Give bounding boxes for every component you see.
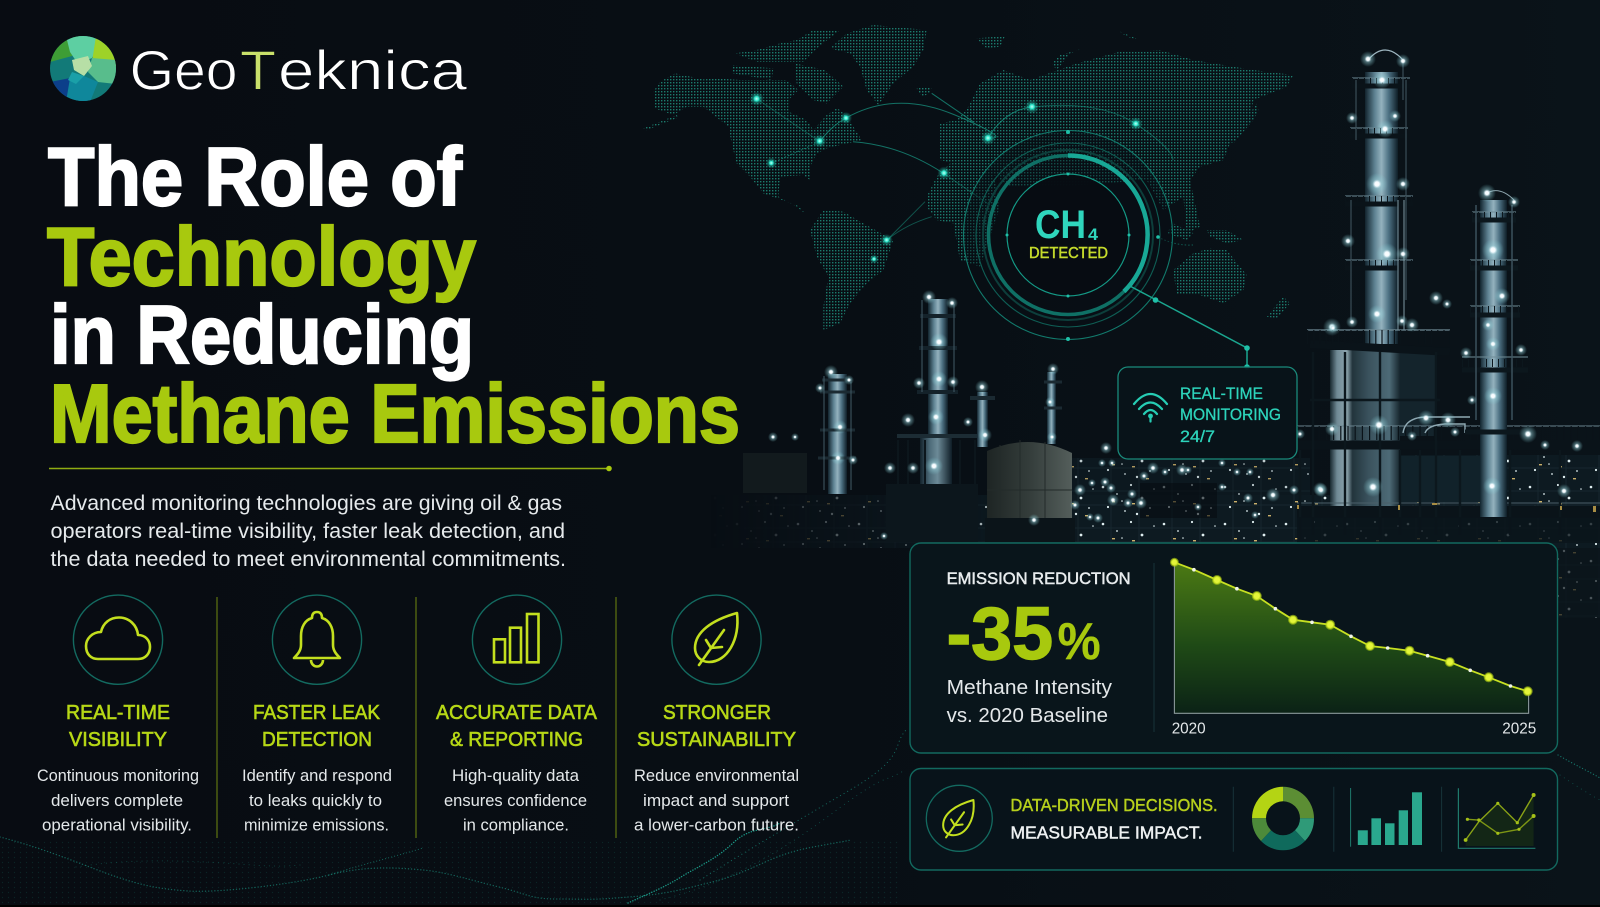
description: Continuous monitoring: [37, 766, 199, 785]
map network arcs: [757, 93, 1193, 245]
ring tick dots: [1006, 130, 1160, 341]
title: Technology: [47, 210, 476, 303]
map glowing nodes: [750, 92, 1142, 264]
refinery: small towers and tanks: [743, 299, 1075, 542]
refinery: second tower: [1462, 191, 1530, 517]
line chart: [1458, 788, 1536, 848]
description: [634, 766, 799, 834]
description: impact and support: [643, 791, 789, 810]
stat description: Methane Intensity: [947, 676, 1113, 699]
heading: VISIBILITY: [69, 728, 167, 751]
chart axis labels: 2025: [1502, 720, 1536, 738]
background wave of dots: [0, 728, 1600, 904]
emission label: EMISSION REDUCTION: [947, 569, 1131, 588]
dotted world map: [640, 20, 1320, 340]
description: [37, 766, 199, 834]
title divider: [49, 466, 612, 471]
heading: ACCURATE DATA: [436, 701, 597, 724]
icon: bar signal: [472, 595, 562, 684]
description: operational visibility.: [42, 816, 192, 834]
CH4 label: [1029, 203, 1108, 262]
big stat: -35: [947, 592, 1053, 675]
callout text: REAL-TIME: [1180, 385, 1263, 403]
heading: & REPORTING: [450, 728, 583, 751]
heading: REAL-TIME: [66, 701, 170, 724]
panel: accurate data and reporting: [436, 595, 597, 834]
description: Identify and respond: [242, 766, 392, 785]
refinery: background plant lights: [710, 455, 1600, 618]
heading: FASTER LEAK: [253, 701, 380, 724]
description: [242, 766, 392, 834]
connector to callout: [1128, 285, 1250, 370]
bar chart: [1351, 788, 1422, 847]
title: in Reducing: [50, 288, 474, 381]
heading: SUSTAINABILITY: [637, 728, 796, 751]
CH4 label: 4: [1088, 225, 1099, 244]
heading: STRONGER: [663, 701, 771, 724]
logo wordmark: Geo: [130, 38, 238, 101]
panel headline: DATA-DRIVEN DECISIONS.: [1010, 795, 1218, 815]
description: High-quality data: [452, 766, 580, 785]
logo: [50, 36, 468, 102]
CH4 label: CH: [1035, 203, 1086, 247]
logo wordmark: [130, 38, 468, 101]
intro paragraph: Advanced monitoring technologies are giving oil & gas: [50, 492, 562, 515]
column dividers: [217, 597, 616, 838]
chart axis labels: [1172, 720, 1536, 738]
CH4 detection target: [964, 130, 1172, 341]
heading: [637, 701, 796, 751]
heading: [66, 701, 170, 751]
big stat: [947, 592, 1101, 675]
stat description: [947, 676, 1113, 727]
chart minor points: [1192, 568, 1512, 688]
refinery: large tower: [1297, 50, 1600, 543]
description: minimize emissions.: [244, 816, 389, 834]
panel: emission reduction: [910, 543, 1558, 753]
description: in compliance.: [463, 816, 569, 834]
description: a lower-carbon future.: [634, 816, 799, 834]
panel headline: [1010, 795, 1218, 842]
chart major points: [1171, 559, 1532, 695]
intro paragraph: operators real-time visibility, faster leak detection, and: [50, 520, 565, 543]
panel headline: MEASURABLE IMPACT.: [1010, 822, 1202, 842]
CH4 label: DETECTED: [1029, 245, 1108, 262]
description: ensures confidence: [444, 791, 587, 810]
heading: DETECTION: [262, 728, 372, 751]
logo globe mark: [50, 36, 116, 102]
panel: stronger sustainability: [634, 595, 799, 834]
panel: data-driven decisions: [910, 768, 1558, 870]
area chart: [1171, 559, 1536, 738]
logo wordmark: T: [240, 38, 276, 101]
description: [444, 766, 587, 834]
title: [47, 130, 740, 460]
title: Methane Emissions: [50, 367, 740, 460]
callout: real-time monitoring: [1118, 367, 1297, 459]
icon: wifi signal: [1134, 394, 1167, 422]
logo wordmark: eknica: [278, 38, 468, 101]
donut chart: [1252, 787, 1314, 850]
icon: leaf: [672, 595, 761, 684]
panel: real-time visibility: [37, 595, 199, 834]
chart axis labels: 2020: [1172, 720, 1206, 738]
heading: [253, 701, 380, 751]
refinery: flood lights: [768, 51, 1583, 540]
icon: bell: [272, 595, 362, 684]
stat description: vs. 2020 Baseline: [947, 704, 1108, 727]
description: delivers complete: [51, 791, 183, 810]
callout text: 24/7: [1180, 428, 1215, 446]
intro paragraph: [50, 492, 566, 571]
icon: leaf badge: [926, 785, 992, 851]
callout text: [1180, 385, 1281, 446]
title: The Role of: [48, 130, 462, 223]
big stat: %: [1058, 613, 1101, 671]
panel: faster leak detection: [242, 595, 392, 834]
icon: cloud: [73, 595, 163, 684]
description: Reduce environmental: [634, 766, 799, 785]
description: to leaks quickly to: [249, 791, 382, 810]
callout text: MONITORING: [1180, 406, 1281, 424]
intro paragraph: the data needed to meet environmental commitments.: [50, 548, 566, 571]
heading: [436, 701, 597, 751]
